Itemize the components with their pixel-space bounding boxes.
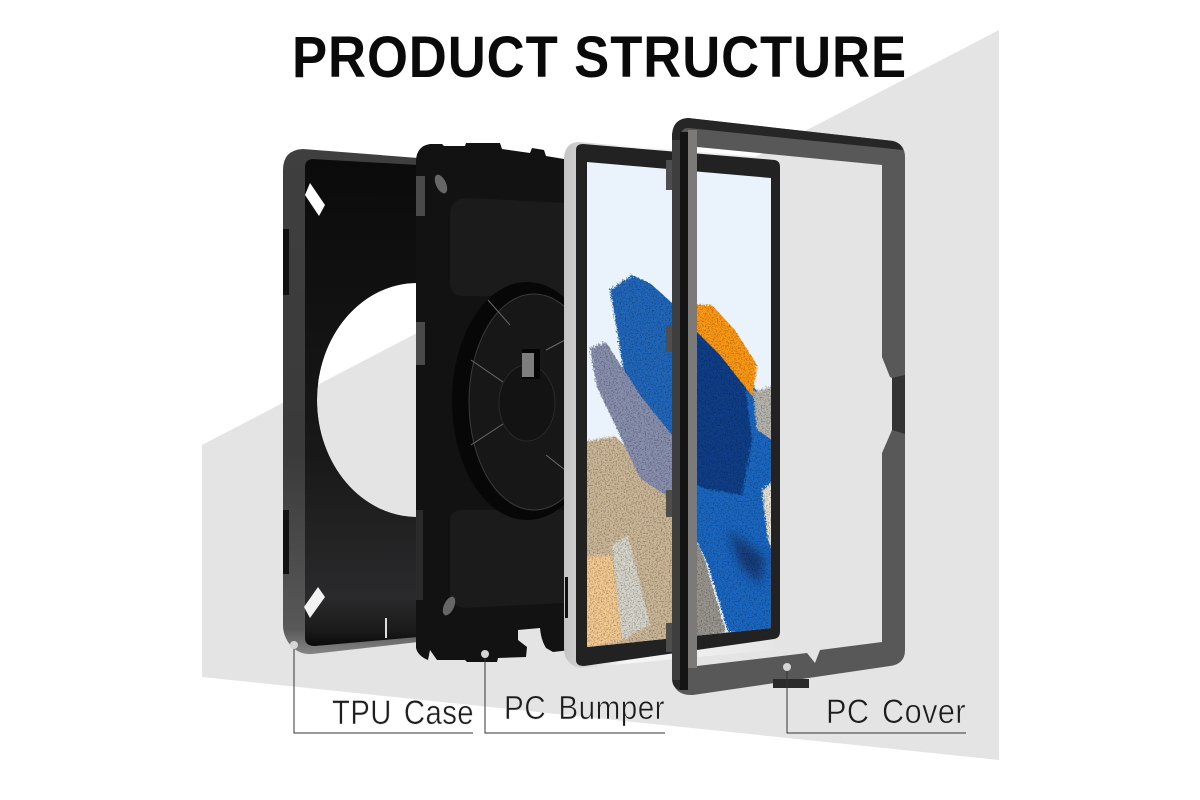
screen wallpaper	[587, 162, 771, 647]
callout: PC Cover	[783, 663, 966, 733]
wallpaper: blue ribbon left	[608, 273, 672, 435]
outer ring	[452, 282, 602, 520]
strap slot: lower	[304, 587, 325, 618]
bumper body	[416, 143, 570, 662]
TPU inner black shell	[305, 159, 418, 646]
background: grey angled panel	[202, 30, 999, 760]
wallpaper: tan sand	[587, 435, 672, 646]
bumper left rail tabs	[416, 176, 425, 216]
volume button	[565, 577, 568, 618]
bottom clip	[773, 679, 809, 688]
cover left dark rail	[672, 140, 680, 680]
wallpaper: orange	[690, 304, 757, 397]
leader line	[294, 645, 473, 733]
callout: TPU Case	[290, 641, 474, 733]
label: TPU Case	[332, 694, 474, 732]
hub	[499, 365, 555, 441]
panel: TPU case	[283, 149, 418, 654]
wallpaper: grey right edge	[752, 386, 771, 440]
label: PC Cover	[826, 693, 966, 731]
wallpaper: blue right	[697, 384, 771, 632]
callout: PC Bumper	[481, 650, 665, 733]
leader line	[485, 654, 665, 733]
strap slot: upper	[305, 183, 325, 216]
wallpaper: sand speckle right edge	[760, 481, 771, 548]
side button cutouts	[283, 229, 289, 295]
small white mark	[385, 618, 387, 638]
wallpaper: pale grey band	[612, 535, 650, 640]
wallpaper: grey-blue ribbon	[588, 341, 672, 496]
marker dot	[290, 641, 298, 649]
upper grip pad	[450, 198, 565, 297]
spokes	[471, 300, 565, 470]
cover side tabs	[666, 160, 673, 652]
rotating disc	[452, 282, 602, 520]
TPU outer rim with circular opening	[283, 149, 418, 654]
marker dot	[481, 650, 489, 658]
panel: PC cover	[666, 118, 905, 695]
panel: tablet	[564, 142, 780, 668]
disc face	[469, 294, 599, 510]
infographic: product structure	[202, 30, 999, 760]
cover black top edge	[672, 118, 903, 690]
right notch rail	[892, 375, 905, 434]
cover black inner rail	[680, 132, 688, 690]
wallpaper: grey at base	[697, 542, 727, 636]
screw posts	[432, 173, 450, 195]
cover frame	[672, 118, 905, 695]
hand strap buckle	[522, 349, 540, 379]
panel: PC bumper	[416, 143, 602, 662]
marker dot	[783, 663, 791, 671]
black bezel	[576, 144, 780, 666]
title: PRODUCT STRUCTURE	[292, 25, 907, 90]
cover light rail	[688, 130, 697, 668]
leader line	[787, 667, 966, 733]
lower grip pad	[450, 510, 565, 608]
wallpaper: navy shadow	[697, 332, 754, 498]
wallpaper: dark speckle patch	[728, 530, 765, 585]
wallpaper: peach band	[587, 554, 623, 647]
silver frame	[564, 142, 774, 668]
label: PC Bumper	[504, 689, 665, 726]
